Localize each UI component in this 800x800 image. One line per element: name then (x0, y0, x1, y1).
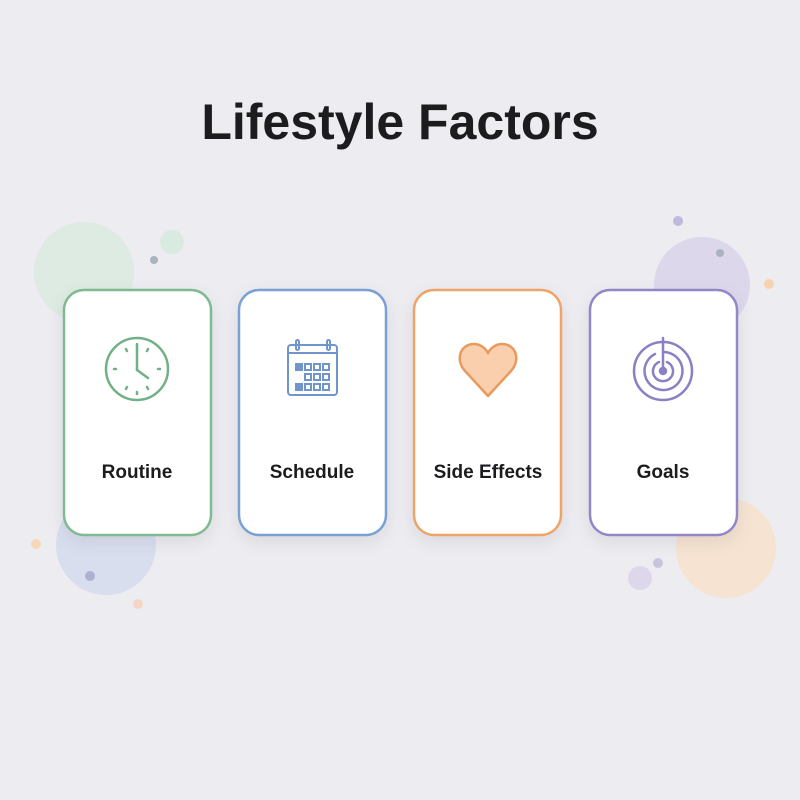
card: Side Effects (414, 290, 561, 535)
label: Side Effects: Side Effects (434, 462, 542, 483)
icon: target (634, 338, 692, 400)
title: Lifestyle Factors (201, 94, 599, 150)
label: Goals: Goals (637, 462, 689, 483)
icon: clock (106, 338, 168, 400)
label: Routine: Routine (102, 462, 172, 483)
decorative bubbles (31, 216, 776, 609)
icon: calendar (288, 340, 337, 395)
card: Schedule (239, 290, 386, 535)
label: Schedule: Schedule (270, 462, 354, 483)
card: Routine (64, 290, 211, 535)
card: Goals (590, 290, 737, 535)
icon: heart (460, 344, 516, 396)
